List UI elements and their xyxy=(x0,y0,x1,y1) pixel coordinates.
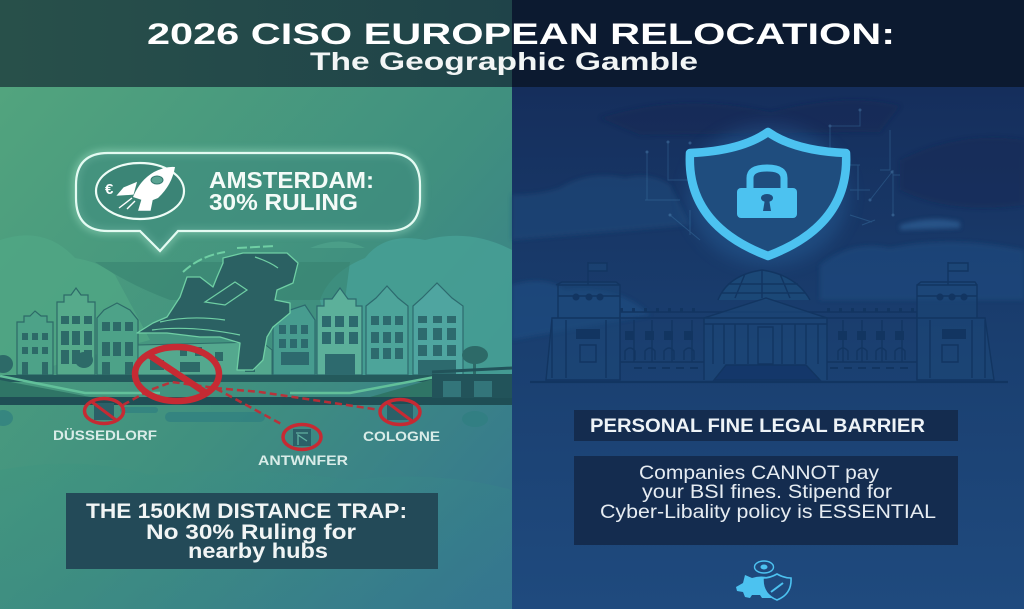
panel: 150km distance trap xyxy=(66,493,438,569)
title: 2026 CISO EUROPEAN RELOCATION: xyxy=(147,18,895,51)
left tower xyxy=(546,262,620,380)
panel: BSI fines explanation xyxy=(574,456,958,545)
icon: rocket with euro xyxy=(96,163,184,219)
panel: personal fine legal barrier xyxy=(574,410,958,441)
padlock xyxy=(737,168,797,218)
trees xyxy=(0,346,488,376)
subtitle: The Geographic Gamble xyxy=(310,48,698,76)
house 5 xyxy=(317,288,362,375)
houses: centre, behind prohibition sign xyxy=(138,342,272,375)
callout value: 30% RULING xyxy=(209,189,358,215)
body line 1: Companies CANNOT pay xyxy=(639,463,880,484)
shield xyxy=(690,132,846,256)
icon: shield with padlock xyxy=(688,125,848,265)
house 4 xyxy=(273,305,315,375)
portico xyxy=(704,298,827,380)
house windows right xyxy=(279,316,456,375)
house 3 xyxy=(97,303,138,375)
bubble glow xyxy=(76,153,420,251)
icon: piggy bank with shield xyxy=(736,561,791,600)
callout heading: AMSTERDAM: xyxy=(209,167,374,193)
house 2 xyxy=(57,288,95,375)
shield glow xyxy=(688,125,848,265)
header band xyxy=(0,0,1024,87)
icon: Cologne blocked xyxy=(380,400,420,424)
label: Düsseldorf: DÜSSEDLORF xyxy=(53,427,157,443)
icon: Düsseldorf blocked xyxy=(84,398,124,424)
trap line 3: nearby hubs xyxy=(188,540,328,563)
panel: Amsterdam left background xyxy=(0,87,512,609)
label: Cologne: COLOGNE xyxy=(363,428,440,444)
houses: right row xyxy=(273,283,463,375)
lower left hills xyxy=(0,464,512,609)
callout: Amsterdam 30% ruling xyxy=(76,153,420,251)
body line 3: Cyber-Libality policy is ESSENTIAL xyxy=(600,502,936,523)
body line 2: your BSI fines. Stipend for xyxy=(642,482,893,503)
house windows left xyxy=(22,316,133,375)
houses: left row xyxy=(17,288,138,375)
illustration: Reichstag building xyxy=(530,262,1008,382)
house 7 xyxy=(413,283,463,375)
bubble outline xyxy=(76,153,420,251)
canal and bridge xyxy=(0,368,512,405)
trap line 2: No 30% Ruling for xyxy=(146,521,356,544)
house 1 xyxy=(17,311,53,375)
trap heading: THE 150KM DISTANCE TRAP: xyxy=(86,500,407,523)
dashed distance lines xyxy=(123,382,380,425)
panel: Germany right background xyxy=(512,87,1024,609)
house 6 xyxy=(366,286,408,375)
dome xyxy=(718,270,810,300)
main body xyxy=(620,312,917,380)
panel: personal fine legal barrier: PERSONAL FINE LEGAL BARRIER xyxy=(590,416,925,437)
right tower xyxy=(917,262,994,380)
clouds: left background xyxy=(0,235,512,380)
icon: rocket with euro: € xyxy=(105,181,114,198)
label: Antwerp: ANTWNFER xyxy=(258,452,348,468)
steps xyxy=(714,365,820,380)
water reflections xyxy=(0,407,488,427)
ground line xyxy=(530,381,1008,383)
windows and columns xyxy=(552,310,985,378)
icon: prohibition sign over hubs xyxy=(135,347,219,401)
map: Netherlands xyxy=(137,246,298,370)
circuit traces xyxy=(645,108,900,240)
icon: Antwerp blocked xyxy=(283,424,321,450)
